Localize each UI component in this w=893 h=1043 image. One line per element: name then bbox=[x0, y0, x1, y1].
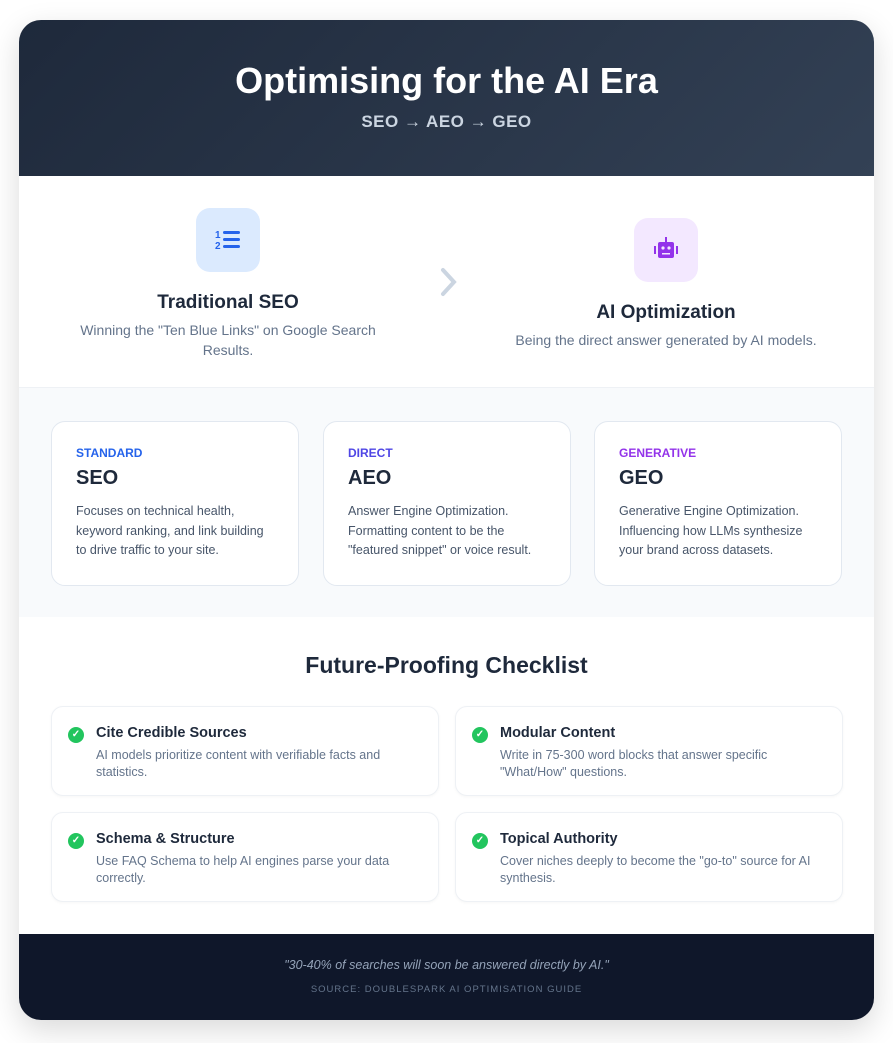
subtitle: SEO → AEO → GEO bbox=[361, 112, 532, 131]
checklist item 3: ✓ bbox=[72, 835, 80, 846]
checklist item 1: AI models prioritize content with verifiable facts and statistics. bbox=[96, 748, 380, 779]
checklist item 4: Cover niches deeply to become the "go-to" source for AI synthesis. bbox=[500, 854, 810, 885]
column: traditional seo: Results. bbox=[203, 342, 253, 358]
card: aeo bbox=[323, 421, 571, 586]
title: Optimising for the AI Era bbox=[235, 60, 658, 101]
checklist item 2: ✓ bbox=[476, 729, 484, 740]
card: geo: Generative Engine Optimization. Influencing how LLMs synthesize your brand across datasets. bbox=[619, 504, 802, 557]
column: ai optimization bbox=[515, 218, 817, 348]
checklist item 2: Modular Content bbox=[500, 725, 615, 741]
icon: numbered list: 2 bbox=[215, 241, 221, 252]
icon: numbered list: 1 bbox=[215, 230, 221, 241]
checklist item 1: Cite Credible Sources bbox=[96, 725, 247, 741]
card: seo: Focuses on technical health, keyword ranking, and link building to drive traffic to your site. bbox=[76, 504, 264, 557]
arrow bbox=[441, 268, 456, 296]
header bbox=[19, 20, 874, 176]
column: traditional seo: Winning the "Ten Blue Links" on Google Search bbox=[80, 322, 376, 338]
icon: robot bbox=[634, 218, 698, 282]
icon: numbered list bbox=[196, 208, 260, 272]
card: seo: STANDARD bbox=[76, 446, 142, 460]
checklist item 2: Write in 75-300 word blocks that answer specific "What/How" questions. bbox=[500, 748, 767, 779]
card: seo: SEO bbox=[76, 467, 118, 489]
column: ai optimization: AI Optimization bbox=[596, 302, 736, 323]
card: aeo: AEO bbox=[348, 467, 391, 489]
checklist item 4: Topical Authority bbox=[500, 831, 618, 847]
checklist item 1 bbox=[51, 706, 439, 796]
column: traditional seo bbox=[80, 208, 376, 358]
footer bbox=[19, 934, 874, 1020]
card: geo: GENERATIVE bbox=[619, 446, 696, 460]
quote: "30-40% of searches will soon be answered directly by AI." bbox=[284, 958, 609, 972]
checklist item 1: ✓ bbox=[72, 729, 80, 740]
column: traditional seo: Traditional SEO bbox=[157, 292, 299, 313]
card: geo bbox=[594, 421, 842, 586]
column: ai optimization: Being the direct answer generated by AI models. bbox=[515, 332, 817, 348]
card: seo bbox=[51, 421, 299, 586]
checklist heading: Future-Proofing Checklist bbox=[305, 652, 588, 678]
checklist item 3 bbox=[51, 812, 439, 902]
card: aeo: Answer Engine Optimization. Formatting content to be the "featured snippet" or voice result. bbox=[348, 504, 531, 557]
checklist item 3: Schema & Structure bbox=[96, 831, 235, 847]
card: geo: GEO bbox=[619, 467, 663, 489]
panel: comparison bbox=[19, 176, 874, 388]
checklist item 3: Use FAQ Schema to help AI engines parse your data correctly. bbox=[96, 854, 389, 885]
checklist item 4: ✓ bbox=[476, 835, 484, 846]
source: SOURCE: DOUBLESPARK AI OPTIMISATION GUIDE bbox=[311, 984, 582, 995]
checklist item 2 bbox=[455, 706, 843, 796]
card: aeo: DIRECT bbox=[348, 446, 393, 460]
checklist item 4 bbox=[455, 812, 843, 902]
panel: definitions bbox=[19, 388, 874, 617]
